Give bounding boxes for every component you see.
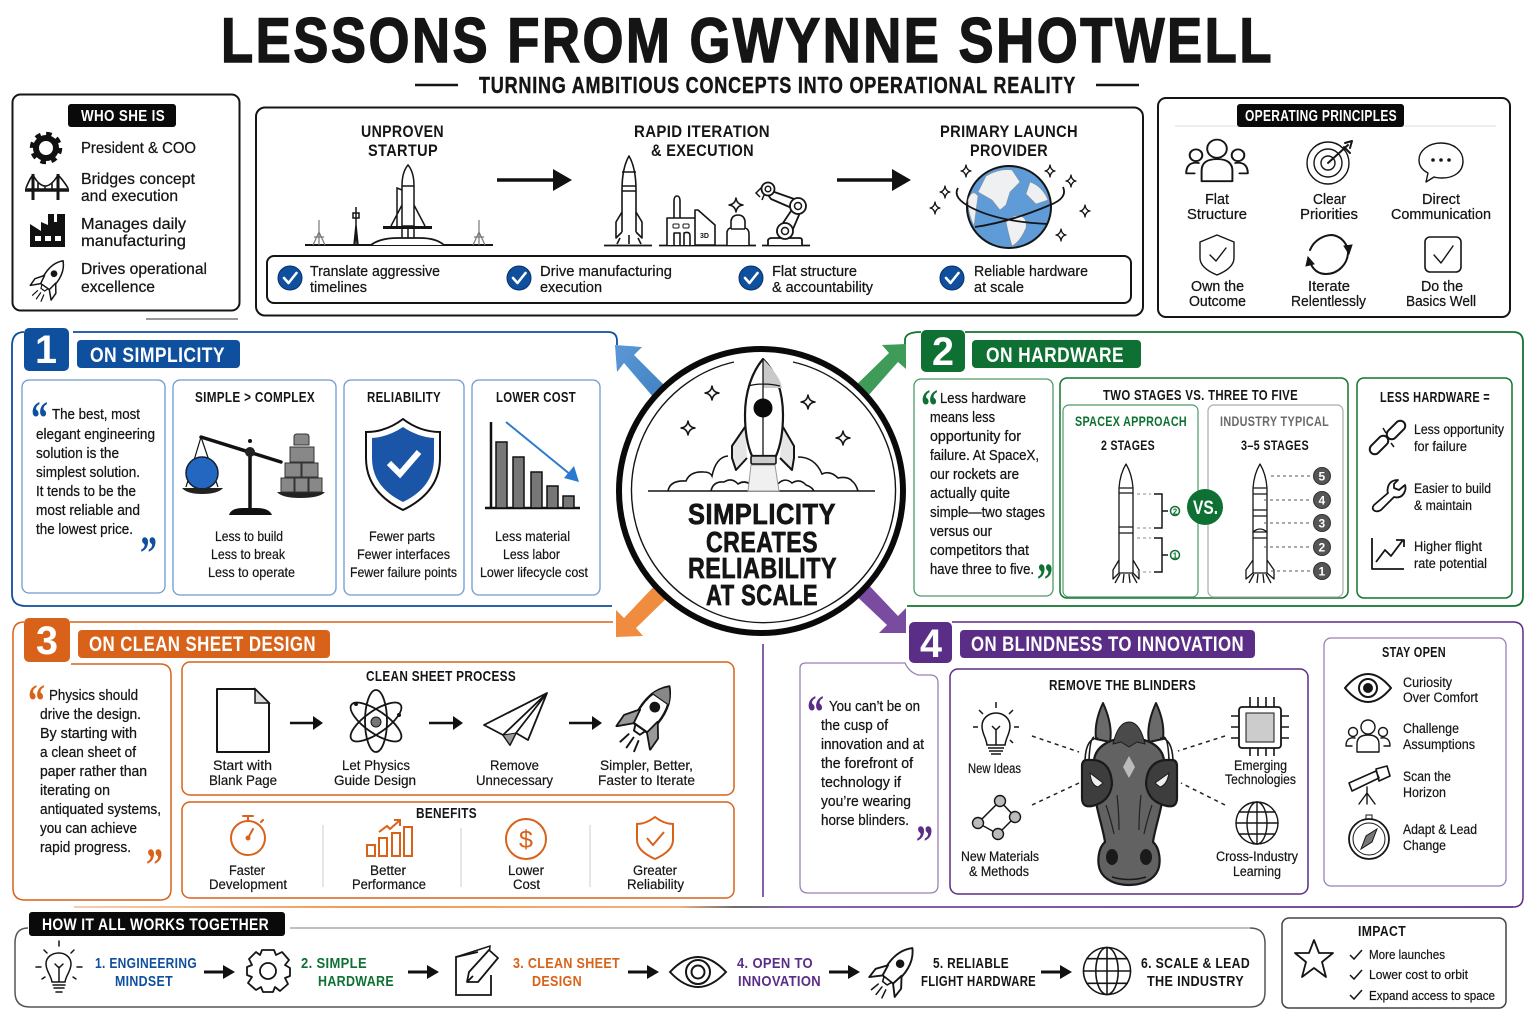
step 6 [1141, 955, 1250, 990]
heading [29, 912, 285, 936]
icon: gear [32, 134, 60, 162]
sub-panel: spacex approach [1063, 405, 1198, 597]
benefit label [352, 863, 426, 892]
quote: a clean sheet of [40, 745, 137, 761]
quote card: “ [807, 686, 824, 739]
step 5 [921, 955, 1036, 990]
quote: paper rather than [40, 764, 147, 780]
panel: how it all works together [15, 912, 1265, 1007]
principle: direct communication: Direct [1422, 191, 1461, 208]
text: easier [1414, 481, 1491, 513]
card: reliability: Fewer failure points [350, 564, 457, 580]
card: benefits [182, 802, 734, 898]
label: Curiosity [1403, 675, 1452, 690]
quote card: ” [140, 527, 157, 580]
step: blank page [209, 689, 277, 788]
step 6: THE INDUSTRY [1147, 973, 1244, 990]
quote card: horse blinders. [821, 813, 909, 829]
text: higher [1414, 539, 1487, 571]
arrow [1041, 965, 1072, 979]
header bar: ON BLINDNESS TO INNOVATION [971, 633, 1244, 656]
sub-panel: industry typical: INDUSTRY TYPICAL [1220, 413, 1329, 429]
sub-panel: spacex approach: 2 [1173, 508, 1178, 516]
step 3: 3. CLEAN SHEET [513, 955, 620, 972]
badge 4: 4 [920, 622, 943, 666]
header bar: ON SIMPLICITY [90, 344, 225, 367]
benefit label: Development [209, 877, 287, 892]
stage: unproven startup: UNPROVEN [361, 123, 444, 141]
header bar [78, 630, 330, 658]
card: reliability: Fewer interfaces [357, 546, 450, 562]
step 1 [95, 955, 197, 990]
check 2: Drive manufacturing [540, 263, 672, 280]
quote card: ” [916, 816, 933, 869]
quote card: versus our [930, 524, 992, 540]
section 4: on blindness to innovation [74, 622, 1523, 907]
card: lower cost [472, 380, 600, 595]
step 3: DESIGN [532, 973, 582, 990]
step 5 icon: rocket [863, 938, 925, 1004]
principle: flat structure: Flat [1205, 191, 1230, 208]
label: Emerging [1234, 758, 1287, 773]
stage: primary launch provider: PRIMARY LAUNCH [940, 123, 1078, 141]
label: Over Comfort [1403, 690, 1478, 705]
label [1403, 822, 1477, 853]
icon: balance scale [182, 434, 325, 515]
card: clean sheet process [182, 662, 734, 795]
quote card: actually quite [930, 486, 1010, 502]
principle: clear priorities: Priorities [1300, 206, 1358, 223]
step 6 icon: globe [1083, 947, 1131, 995]
central badge [619, 349, 903, 633]
principle: do the basics well: Basics Well [1406, 293, 1476, 310]
step 2: HARDWARE [318, 973, 394, 990]
quote card: opportunity for [930, 429, 1021, 445]
card: stay open: STAY OPEN [1382, 645, 1446, 661]
quote card: It tends to be the [36, 484, 136, 500]
item: drives [81, 261, 207, 296]
message: AT SCALE [706, 580, 818, 612]
list: Lower cost to orbit [1369, 967, 1468, 982]
quote card: technology if [821, 775, 902, 791]
principle: clear priorities: Clear [1313, 191, 1346, 208]
benefit label: Faster [229, 863, 265, 878]
text: less opportunity [1414, 422, 1504, 454]
title: LESSONS FROM GWYNNE SHOTWELL [221, 6, 1274, 76]
step 1: 1. ENGINEERING [95, 955, 197, 972]
quote card: Less hardware [940, 391, 1026, 407]
stage: unproven startup [305, 123, 493, 245]
step 2 [301, 955, 394, 990]
principle: do the basics well: Do the [1421, 278, 1463, 295]
quote: you can achieve [40, 821, 137, 837]
arrow: to section 4 [850, 578, 906, 633]
icon: star [1295, 940, 1333, 977]
item: manages: Manages daily [81, 216, 186, 233]
arrow: to section 2 [848, 344, 906, 405]
card: reliability [344, 380, 464, 595]
label [1403, 721, 1475, 752]
icon: chip [1231, 697, 1289, 756]
check 4: Reliable hardware [974, 263, 1088, 280]
step: rocket: Simpler, Better, [600, 757, 693, 773]
icon: bridge [25, 174, 69, 200]
benefit label: Better [370, 863, 406, 878]
arrow 1 [497, 169, 572, 191]
badge 1 [24, 328, 69, 372]
label: Cross-Industry [1216, 849, 1298, 864]
arrow [204, 965, 235, 979]
badge 3 [24, 618, 70, 663]
step: physics [334, 690, 416, 788]
step 6: 6. SCALE & LEAD [1141, 955, 1250, 972]
quote card: innovation and at [821, 737, 924, 753]
benefit: faster development [231, 816, 265, 855]
quote card: failure. At SpaceX, [930, 448, 1039, 464]
quote: antiquated systems, [40, 802, 161, 818]
sub-panel: industry typical: 3–5 STAGES [1241, 438, 1309, 453]
badge 3: 3 [36, 619, 58, 663]
step: blank page: Blank Page [209, 772, 277, 788]
quote card: “ [921, 380, 938, 433]
card: simple > complex: Less to operate [208, 564, 295, 580]
icon: wrench [1373, 480, 1406, 511]
stage: primary launch provider [930, 123, 1090, 248]
step 4: INNOVATION [738, 973, 821, 990]
quote card: have three to five. [930, 562, 1034, 578]
item: bridges: and execution [81, 188, 178, 205]
label: Learning [1233, 864, 1281, 879]
quote card: The best, most [52, 407, 140, 423]
card: lower cost: LOWER COST [496, 389, 576, 406]
principle: direct communication [1391, 143, 1491, 223]
card: lower cost: Less material [495, 528, 570, 544]
principle: do the basics well [1406, 237, 1476, 310]
heading: IMPACT [1358, 924, 1406, 940]
icon: shield [366, 419, 440, 510]
label [1225, 758, 1296, 787]
card: lower cost: Less labor [503, 546, 560, 562]
icon: people [1346, 720, 1390, 752]
check 4: at scale [974, 279, 1024, 296]
stage: rapid iteration: 3D [700, 233, 709, 240]
quote card [914, 379, 1053, 607]
subtitle: TURNING AMBITIOUS CONCEPTS INTO OPERATIONAL REALITY [479, 72, 1076, 98]
text: higher: Higher flight [1414, 539, 1482, 554]
quote card: most reliable and [36, 503, 140, 519]
quote card: means less [930, 410, 995, 426]
label: Scan the [1403, 769, 1451, 784]
stage: rapid iteration: & EXECUTION [651, 142, 754, 160]
benefit label: Lower [508, 863, 544, 878]
principle: flat structure: Structure [1187, 206, 1247, 223]
principle: own the outcome [1189, 235, 1246, 310]
badge 2 [921, 330, 965, 374]
step 3 [513, 955, 620, 990]
step: blank page: Start with [213, 757, 272, 773]
heading: who she is: WHO SHE IS [81, 108, 165, 125]
step 4 icon: eye [670, 957, 726, 987]
sub-panel: industry typical: 5 [1318, 470, 1326, 484]
text: higher: rate potential [1414, 556, 1487, 571]
section 1: on simplicity [12, 328, 617, 606]
item: manages [81, 216, 186, 250]
benefit label [508, 863, 544, 892]
card: simple > complex: Less to build [215, 528, 283, 544]
icon: rocket [26, 253, 73, 306]
principle: iterate relentlessly: Iterate [1308, 278, 1350, 295]
quote card: the lowest price. [36, 522, 133, 538]
card: benefits: BENEFITS [416, 805, 477, 822]
card: less hardware = [1357, 378, 1512, 598]
icon: materials network [972, 796, 1020, 840]
quote card: solution is the [36, 446, 119, 462]
step 4 [737, 955, 821, 990]
sub-panel: spacex approach: SPACEX APPROACH [1075, 413, 1187, 429]
quote card [22, 380, 165, 593]
heading [1237, 104, 1404, 127]
quote card: simplest solution. [36, 465, 140, 481]
quote card: our rockets are [930, 467, 1019, 483]
header bar [960, 630, 1255, 658]
check 3: & accountability [772, 279, 873, 296]
card: lower cost: Lower lifecycle cost [480, 564, 588, 580]
panel: who she is [12, 94, 240, 319]
sub-panel: spacex approach: 1 [1173, 552, 1178, 560]
step 1: MINDSET [115, 973, 173, 990]
label: Assumptions [1403, 737, 1475, 752]
label: Technologies [1225, 772, 1296, 787]
stage: unproven startup: STARTUP [368, 142, 438, 160]
check 1: timelines [310, 279, 367, 296]
label [1403, 675, 1478, 705]
icon: compass [1349, 815, 1389, 859]
sub-panel: industry typical [1208, 405, 1343, 597]
card: simple > complex [173, 380, 336, 595]
item: bridges: Bridges concept [81, 171, 196, 188]
label [961, 849, 1039, 879]
panel: impact [1282, 918, 1506, 1008]
step 5: 5. RELIABLE [933, 955, 1009, 972]
badge 1: 1 [35, 328, 57, 372]
text: easier: & maintain [1414, 498, 1472, 513]
item: president: President & COO [81, 140, 196, 157]
icon: telescope [1349, 766, 1390, 804]
quote card: the cusp of [821, 718, 889, 734]
icon: new ideas bulb [973, 702, 1019, 754]
message: RELIABILITY [688, 553, 837, 585]
arrow 2 [837, 169, 911, 191]
quote card: ” [1037, 554, 1053, 607]
vs badge [1187, 489, 1223, 525]
step 4: 4. OPEN TO [737, 955, 813, 972]
label: New Ideas [968, 761, 1021, 776]
quote: rapid progress. [40, 840, 131, 856]
arrow [628, 965, 659, 979]
quote card: elegant engineering [36, 427, 155, 443]
check 1 [278, 263, 440, 296]
bar chart: declining cost [485, 422, 580, 508]
step 2 icon: gear [247, 950, 290, 992]
step 3 icon: notepad [456, 946, 498, 995]
heading: HOW IT ALL WORKS TOGETHER [42, 915, 269, 934]
quote: ” [146, 839, 163, 892]
quote card: You can’t be on [829, 699, 920, 715]
vs badge: VS. [1193, 498, 1218, 519]
label: New Materials [961, 849, 1039, 864]
message: SIMPLICITY [688, 499, 836, 531]
principle: own the outcome: Own the [1191, 278, 1244, 295]
icon: globe [1236, 802, 1278, 844]
text: easier: Easier to build [1414, 481, 1491, 496]
principle: flat structure [1186, 140, 1248, 223]
sub-panel: industry typical: 3 [1318, 516, 1326, 530]
label: Challenge [1403, 721, 1459, 736]
stage: rapid iteration [604, 123, 810, 246]
principle: direct communication: Communication [1391, 206, 1491, 223]
header bar: ON HARDWARE [986, 344, 1124, 367]
sub-panel: spacex approach: 2 STAGES [1101, 438, 1155, 453]
principle: iterate relentlessly [1291, 235, 1366, 310]
quote card: competitors that [930, 543, 1029, 559]
message [688, 499, 837, 612]
quote: drive the design. [40, 707, 141, 723]
checklist bar [267, 256, 1131, 303]
step: physics: Guide Design [334, 772, 416, 788]
sub-panel: industry typical: 4 [1318, 494, 1326, 508]
label [1403, 769, 1451, 800]
arrow [569, 716, 602, 730]
step 2: 2. SIMPLE [301, 955, 367, 972]
arrow: to section 3 [616, 580, 673, 637]
label: Change [1403, 838, 1446, 853]
quote: iterating on [40, 783, 110, 799]
quote [28, 675, 163, 892]
quote card: simple—two stages [930, 505, 1045, 521]
panel: operating principles [1158, 98, 1510, 317]
card: remove the blinders [950, 669, 1308, 894]
principle: clear priorities [1300, 141, 1358, 223]
step: rocket [598, 675, 695, 788]
quote card: “ [31, 392, 48, 445]
check 1: Translate aggressive [310, 263, 440, 280]
section 3: on clean sheet design [13, 618, 734, 900]
header bar: ON CLEAN SHEET DESIGN [89, 633, 316, 656]
card: less hardware =: LESS HARDWARE = [1380, 389, 1490, 406]
step: remove unnecessary: Unnecessary [476, 772, 553, 788]
check 3: Flat structure [772, 263, 857, 280]
arrow: to section 1 [615, 345, 672, 405]
panel: journey [256, 108, 1143, 316]
step: remove unnecessary [476, 693, 553, 788]
badge 4 [909, 622, 952, 666]
quote: By starting with [40, 726, 137, 742]
benefit label [209, 863, 287, 892]
arrow [429, 716, 463, 730]
principle: iterate relentlessly: Relentlessly [1291, 293, 1366, 310]
label: Horizon [1403, 785, 1446, 800]
item: bridges [81, 171, 196, 205]
stage: primary launch provider: PROVIDER [970, 142, 1048, 160]
step: remove unnecessary: Remove [490, 757, 539, 773]
label: & Methods [969, 864, 1029, 879]
benefit: better performance [367, 820, 412, 856]
card: clean sheet process: CLEAN SHEET PROCESS [366, 668, 516, 685]
benefit label: Greater [633, 863, 677, 878]
quote: Physics should [49, 688, 138, 704]
card: simple > complex: SIMPLE > COMPLEX [195, 389, 315, 406]
heading: who she is [68, 104, 176, 127]
arrow [408, 965, 439, 979]
check 4 [940, 263, 1088, 296]
card: reliability: Fewer parts [369, 528, 435, 544]
message: CREATES [706, 527, 818, 559]
arrow [829, 965, 860, 979]
benefit label: Performance [352, 877, 426, 892]
card: two stages vs three to five [1060, 378, 1348, 598]
card: two stages vs three to five: TWO STAGES VS. THREE TO FIVE [1103, 387, 1298, 404]
illustration: rocket launch [648, 359, 875, 491]
text: less opportunity: Less opportunity [1414, 422, 1504, 437]
sub-panel: industry typical: 1 [1318, 564, 1326, 578]
list [1350, 947, 1495, 1003]
icon: factory [30, 214, 65, 247]
quote card [800, 663, 938, 893]
list: Expand access to space [1369, 988, 1495, 1003]
benefit label: Cost [513, 877, 540, 892]
step: rocket: Faster to Iterate [598, 772, 695, 788]
stage: rapid iteration: RAPID ITERATION [634, 123, 770, 141]
icon: broken chain [1368, 419, 1407, 456]
sub-panel: industry typical: 2 [1318, 540, 1326, 554]
heading: OPERATING PRINCIPLES [1245, 108, 1397, 125]
list: More launches [1369, 947, 1445, 962]
icon: rising chart [1372, 538, 1404, 569]
card: reliability: RELIABILITY [367, 389, 441, 406]
benefit: lower cost: $ [519, 826, 533, 854]
quote card: you’re wearing [821, 794, 911, 810]
step 1 icon: bulb [36, 941, 82, 992]
label: Adapt & Lead [1403, 822, 1477, 837]
icon: eye [1345, 674, 1391, 702]
arrow [290, 716, 323, 730]
step 5: FLIGHT HARDWARE [921, 973, 1036, 990]
card: stay open [1324, 638, 1506, 886]
item: manages: manufacturing [81, 233, 186, 250]
label [1216, 849, 1298, 879]
quote: “ [28, 675, 45, 728]
card: remove the blinders: REMOVE THE BLINDERS [1049, 677, 1196, 694]
item: drives: excellence [81, 279, 155, 296]
step: physics: Let Physics [342, 757, 410, 773]
principle: own the outcome: Outcome [1189, 293, 1246, 310]
benefit: lower cost [506, 819, 546, 859]
item: drives: Drives operational [81, 261, 207, 278]
check 2: execution [540, 279, 602, 296]
card: simple > complex: Less to break [211, 546, 286, 562]
text: less opportunity: for failure [1414, 439, 1467, 454]
check 3 [739, 263, 873, 296]
quote card: the forefront of [821, 756, 914, 772]
benefit label [627, 863, 684, 892]
badge 2: 2 [932, 330, 954, 374]
benefit label: Reliability [627, 877, 684, 892]
section 2: on hardware [905, 330, 1523, 607]
check 2 [507, 263, 672, 296]
benefit: greater reliability [637, 817, 673, 859]
illustration: horse with blinders [1082, 703, 1177, 885]
